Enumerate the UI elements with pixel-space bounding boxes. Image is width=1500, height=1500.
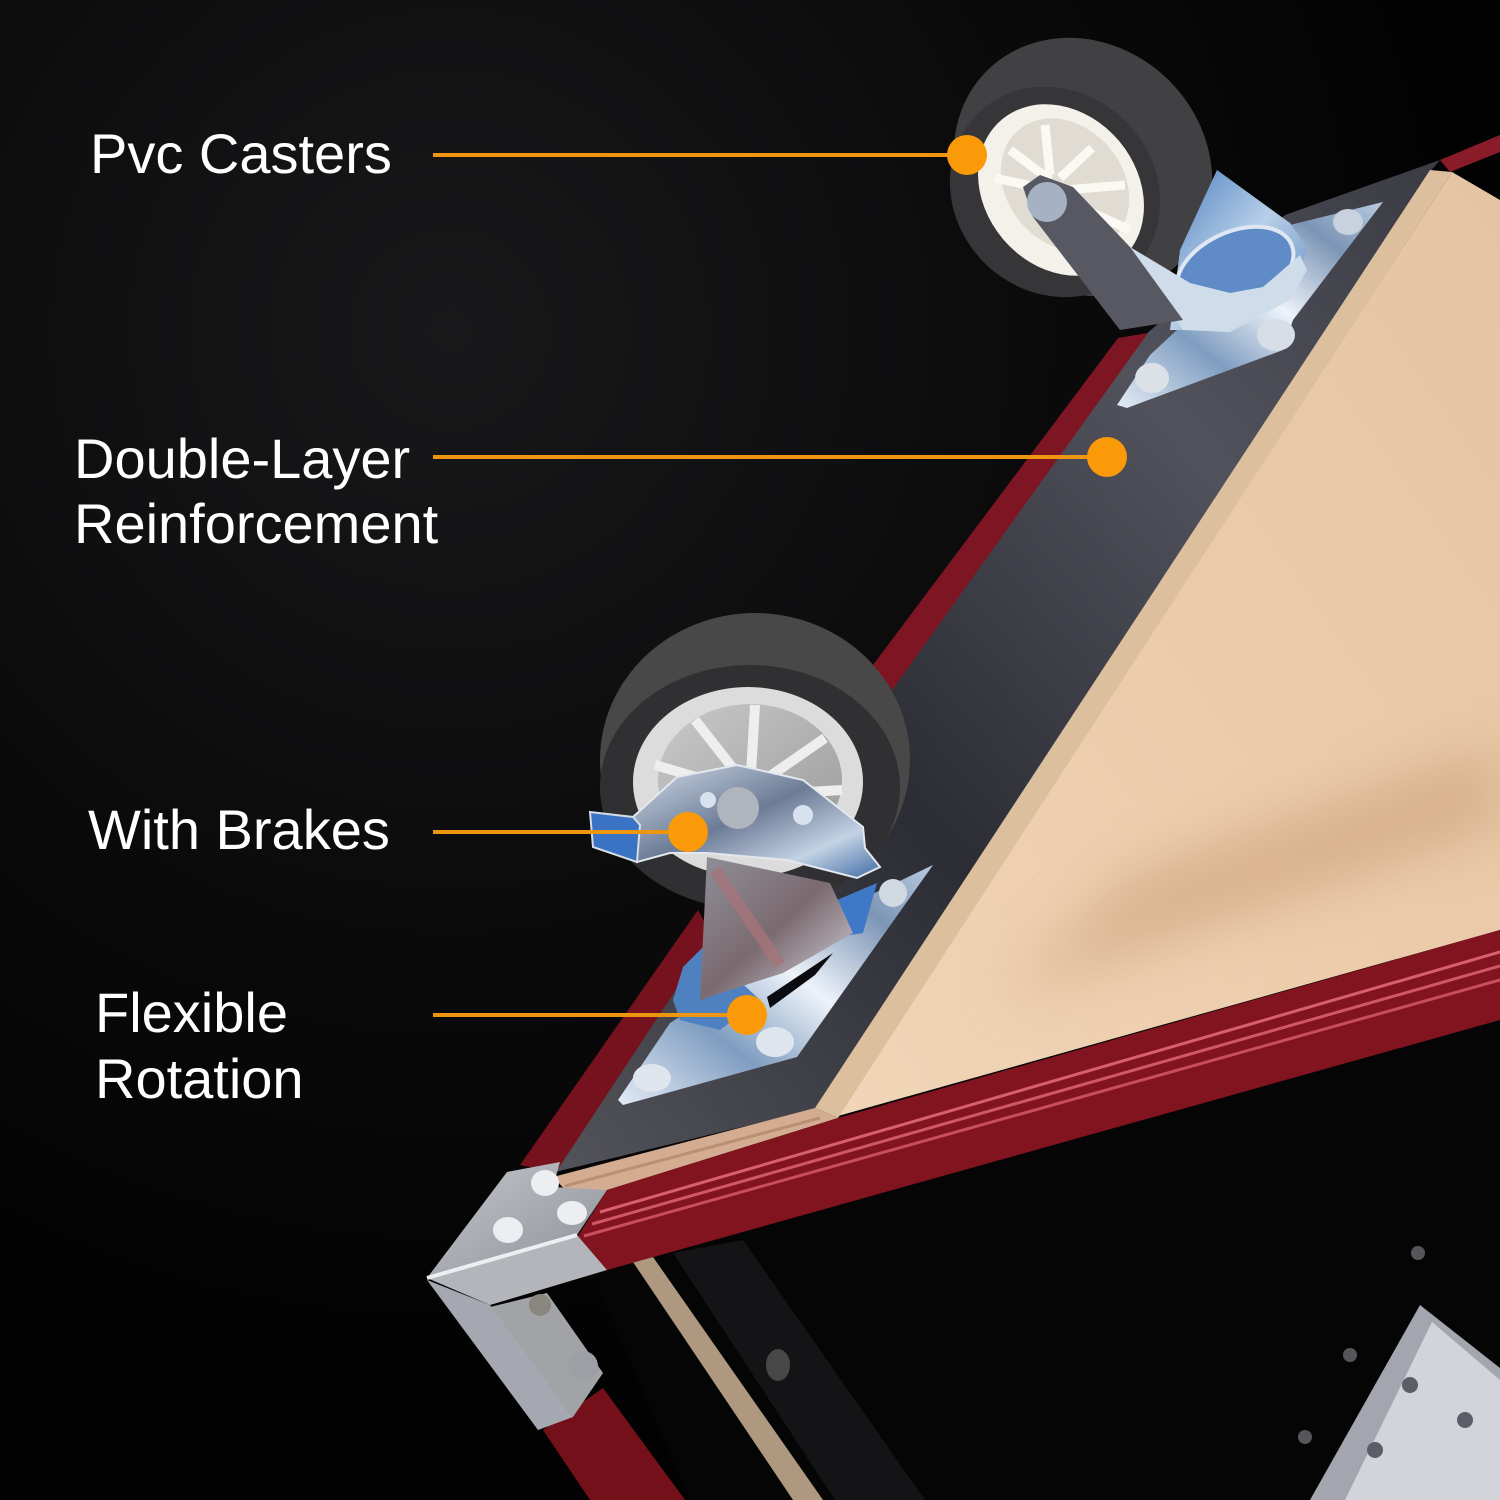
hub spokes xyxy=(655,704,842,856)
upper caster xyxy=(901,0,1383,408)
rack rail xyxy=(673,1240,925,1500)
brake lever xyxy=(633,765,880,878)
red side trim upper xyxy=(873,333,1148,690)
label: Flexible Rotation: Flexible xyxy=(95,981,288,1044)
inner plywood post xyxy=(633,1257,823,1500)
callout: Double-Layer Reinforcement xyxy=(433,437,1127,477)
corner bracket xyxy=(427,1162,607,1430)
brake pedal xyxy=(590,812,640,862)
swivel ring back xyxy=(673,947,760,1030)
lower caster xyxy=(590,613,933,1105)
lower cabinet dark area xyxy=(590,1020,1500,1500)
plywood front edge xyxy=(553,1108,838,1200)
mounting plate xyxy=(618,865,933,1105)
red lower post xyxy=(543,1388,685,1500)
red front trim xyxy=(578,930,1500,1270)
wheel tread xyxy=(901,0,1265,349)
bearing slit xyxy=(767,953,833,1008)
red side trim lower xyxy=(520,910,712,1172)
swivel rivet xyxy=(700,787,813,829)
axle bolt xyxy=(1027,182,1067,222)
plate bolts xyxy=(633,879,907,1092)
hub spokes xyxy=(974,93,1156,277)
wood surface soft shadow xyxy=(1000,750,1500,1000)
swivel bracket back xyxy=(1170,170,1307,330)
label: Flexible Rotation: Rotation xyxy=(95,1047,304,1110)
blue back right xyxy=(837,883,877,935)
wheel tread xyxy=(600,613,910,907)
red top trim xyxy=(1440,135,1500,172)
hinge plate lower right xyxy=(1298,1246,1500,1500)
plywood edge strip xyxy=(815,170,1452,1118)
callout: Flexible Rotation xyxy=(433,995,767,1035)
platform: wood surface xyxy=(838,172,1500,1116)
plate bolts xyxy=(1135,209,1363,393)
label: Double-Layer Reinforcement: Reinforcement xyxy=(74,492,439,555)
wheel hub xyxy=(944,71,1178,309)
label: With Brakes: With Brakes xyxy=(88,798,390,861)
bearing ring xyxy=(1163,209,1307,331)
label: Pvc Casters: Pvc Casters xyxy=(90,122,392,185)
fork arm xyxy=(700,857,853,1000)
callout: With Brakes xyxy=(433,812,708,852)
label: Double-Layer Reinforcement: Double-Layer xyxy=(74,427,410,490)
mounting plate xyxy=(1117,202,1383,408)
wheel side xyxy=(600,665,900,909)
chrome curve xyxy=(1130,247,1307,332)
wheel hub xyxy=(633,687,863,877)
fork arm xyxy=(1023,175,1183,330)
wheel side xyxy=(907,44,1203,340)
red streak on fork xyxy=(715,870,780,965)
callout: Pvc Casters xyxy=(433,135,987,175)
reinforcement plate xyxy=(555,160,1440,1172)
